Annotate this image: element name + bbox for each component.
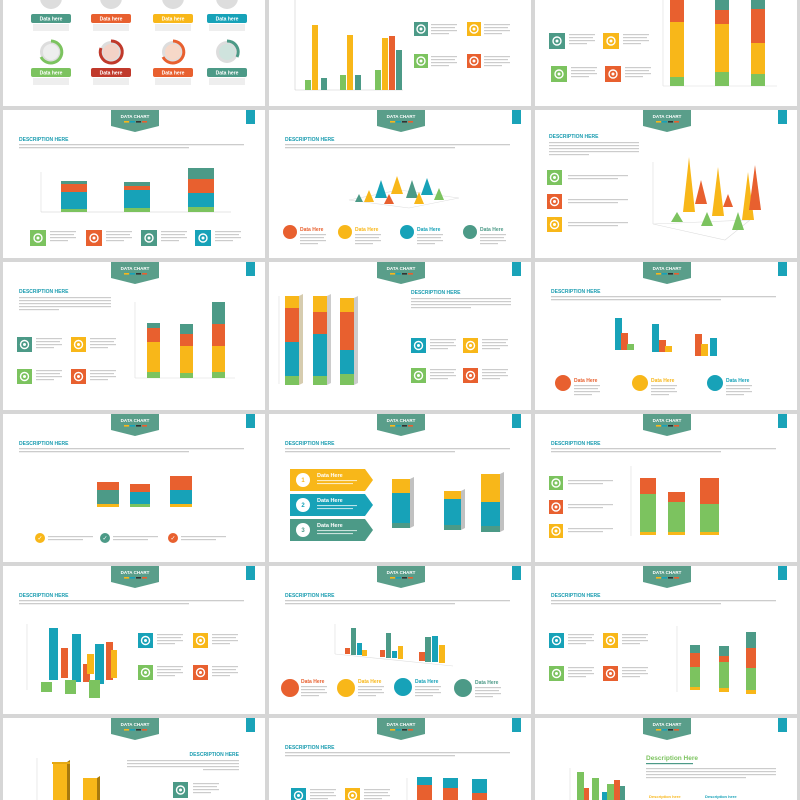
icons: [549, 476, 613, 538]
check items: [35, 533, 226, 543]
icon: [173, 782, 219, 798]
description: DESCRIPTION HERE: [549, 134, 599, 140]
slide: 2D stacked bars with 4 icons (row1 col0): [3, 110, 265, 258]
data circles: Data Here: [726, 378, 750, 384]
check items: ✓: [170, 536, 176, 542]
stacked bar chart: [663, 0, 777, 86]
pills row 2: Data here: [216, 70, 239, 76]
slide: icons left, 3D stacked bars right (row3 col2): [535, 414, 797, 562]
description: Description here: [649, 794, 681, 799]
icons: [547, 170, 628, 232]
slide: cubes with checks (row3 col0): [3, 414, 265, 562]
numbered arrows: 2: [301, 503, 305, 509]
3D bar chart: [615, 318, 717, 356]
data circles: [555, 375, 752, 395]
slide: 3D bars with 3 circles (row2 col2): [535, 262, 797, 410]
cone chart: [349, 176, 459, 208]
data circles: Data Here: [355, 227, 379, 233]
data circles: Data Here: [415, 679, 439, 685]
slide: 3D stacked bars left (row2 col1): [269, 262, 531, 410]
bar chart: [37, 758, 100, 800]
pills row 2: Data here: [40, 70, 63, 76]
pills row 1: Data here: [162, 16, 185, 22]
description: DESCRIPTION HERE: [19, 289, 69, 295]
data circles: Data Here: [417, 227, 441, 233]
description: Description Here: [646, 755, 698, 762]
data circles: Data Here: [301, 679, 325, 685]
description: Description here: [705, 794, 737, 799]
cylinder chart: [677, 626, 756, 694]
slide: grouped bar chart (row0 col1): [269, 0, 531, 106]
pills row 1: Data here: [40, 16, 63, 22]
icons: [291, 788, 390, 800]
check items: ✓: [37, 536, 43, 542]
icons: [549, 633, 648, 681]
pills row 2: [31, 68, 247, 85]
numbered arrows: [290, 469, 373, 541]
bar chart: [295, 0, 403, 90]
stacked bars: [407, 777, 487, 800]
slide: gauges (row0 col0): [3, 0, 265, 106]
3D stacked bars: [631, 466, 719, 536]
data circles: Data Here: [300, 227, 324, 233]
description: [19, 289, 111, 310]
description: DESCRIPTION HERE: [190, 752, 240, 758]
cube chart: [97, 476, 192, 507]
description: [549, 134, 639, 155]
pills row 1: Data here: [216, 16, 239, 22]
numbered arrows: Data Here: [317, 473, 343, 479]
data circles: [283, 225, 506, 244]
numbered arrows: Data Here: [317, 498, 343, 504]
icons row: [30, 230, 241, 246]
icons: [414, 22, 510, 68]
slide: stacked bars right, icons left (row2 col0): [3, 262, 265, 410]
stacked bar chart: [135, 302, 235, 378]
gauge circles top: [40, 0, 238, 9]
pills row 2: Data here: [162, 70, 185, 76]
3D stacked bars: [279, 294, 358, 385]
numbered arrows: 3: [301, 528, 305, 534]
description: [646, 755, 776, 799]
slide: icons and bars (row5 col1): [269, 718, 531, 800]
description: [411, 290, 511, 308]
icons: [138, 633, 238, 680]
numbered arrows: Data Here: [317, 523, 343, 529]
data circles: Data Here: [480, 227, 504, 233]
gauge circles: [40, 41, 238, 63]
3D bar chart: [27, 624, 117, 698]
icons: [549, 33, 651, 82]
slide: cones with 4 data circles (row1 col1): [269, 110, 531, 258]
slide: yellow bars, description right (row5 col0): [3, 718, 265, 800]
slide: numbered arrows with 3D bars (row3 col1): [269, 414, 531, 562]
data circles: Data Here: [475, 680, 499, 686]
icons: [17, 337, 116, 384]
pills row 2: Data here: [100, 70, 123, 76]
data circles: Data Here: [358, 679, 382, 685]
slide: cones with left icons (row1 col2): [535, 110, 797, 258]
cylinder chart: [335, 624, 453, 666]
description: [127, 752, 240, 770]
slide: cylinders with 4 circles (row4 col1): [269, 566, 531, 714]
data circles: [281, 678, 501, 697]
data circles: Data Here: [651, 378, 675, 384]
slide: green bars with description (row5 col2): [535, 718, 797, 800]
check items: ✓: [102, 536, 108, 542]
numbered arrows: 1: [301, 478, 305, 484]
data circles: Data Here: [574, 378, 598, 384]
pills row 1: Data here: [100, 16, 123, 22]
pills row 1: [31, 14, 247, 31]
slide: icons left, cylinders right (row4 col2): [535, 566, 797, 714]
3D bars: [392, 472, 504, 532]
stacked bar chart: [41, 168, 231, 212]
cone chart: [653, 157, 761, 240]
slide: stacked bars (row0 col2): [535, 0, 797, 106]
slide: 3D bars with icons right (row4 col0): [3, 566, 265, 714]
icons: [411, 338, 508, 383]
description: DESCRIPTION HERE: [411, 290, 461, 296]
bar chart: [570, 768, 625, 800]
